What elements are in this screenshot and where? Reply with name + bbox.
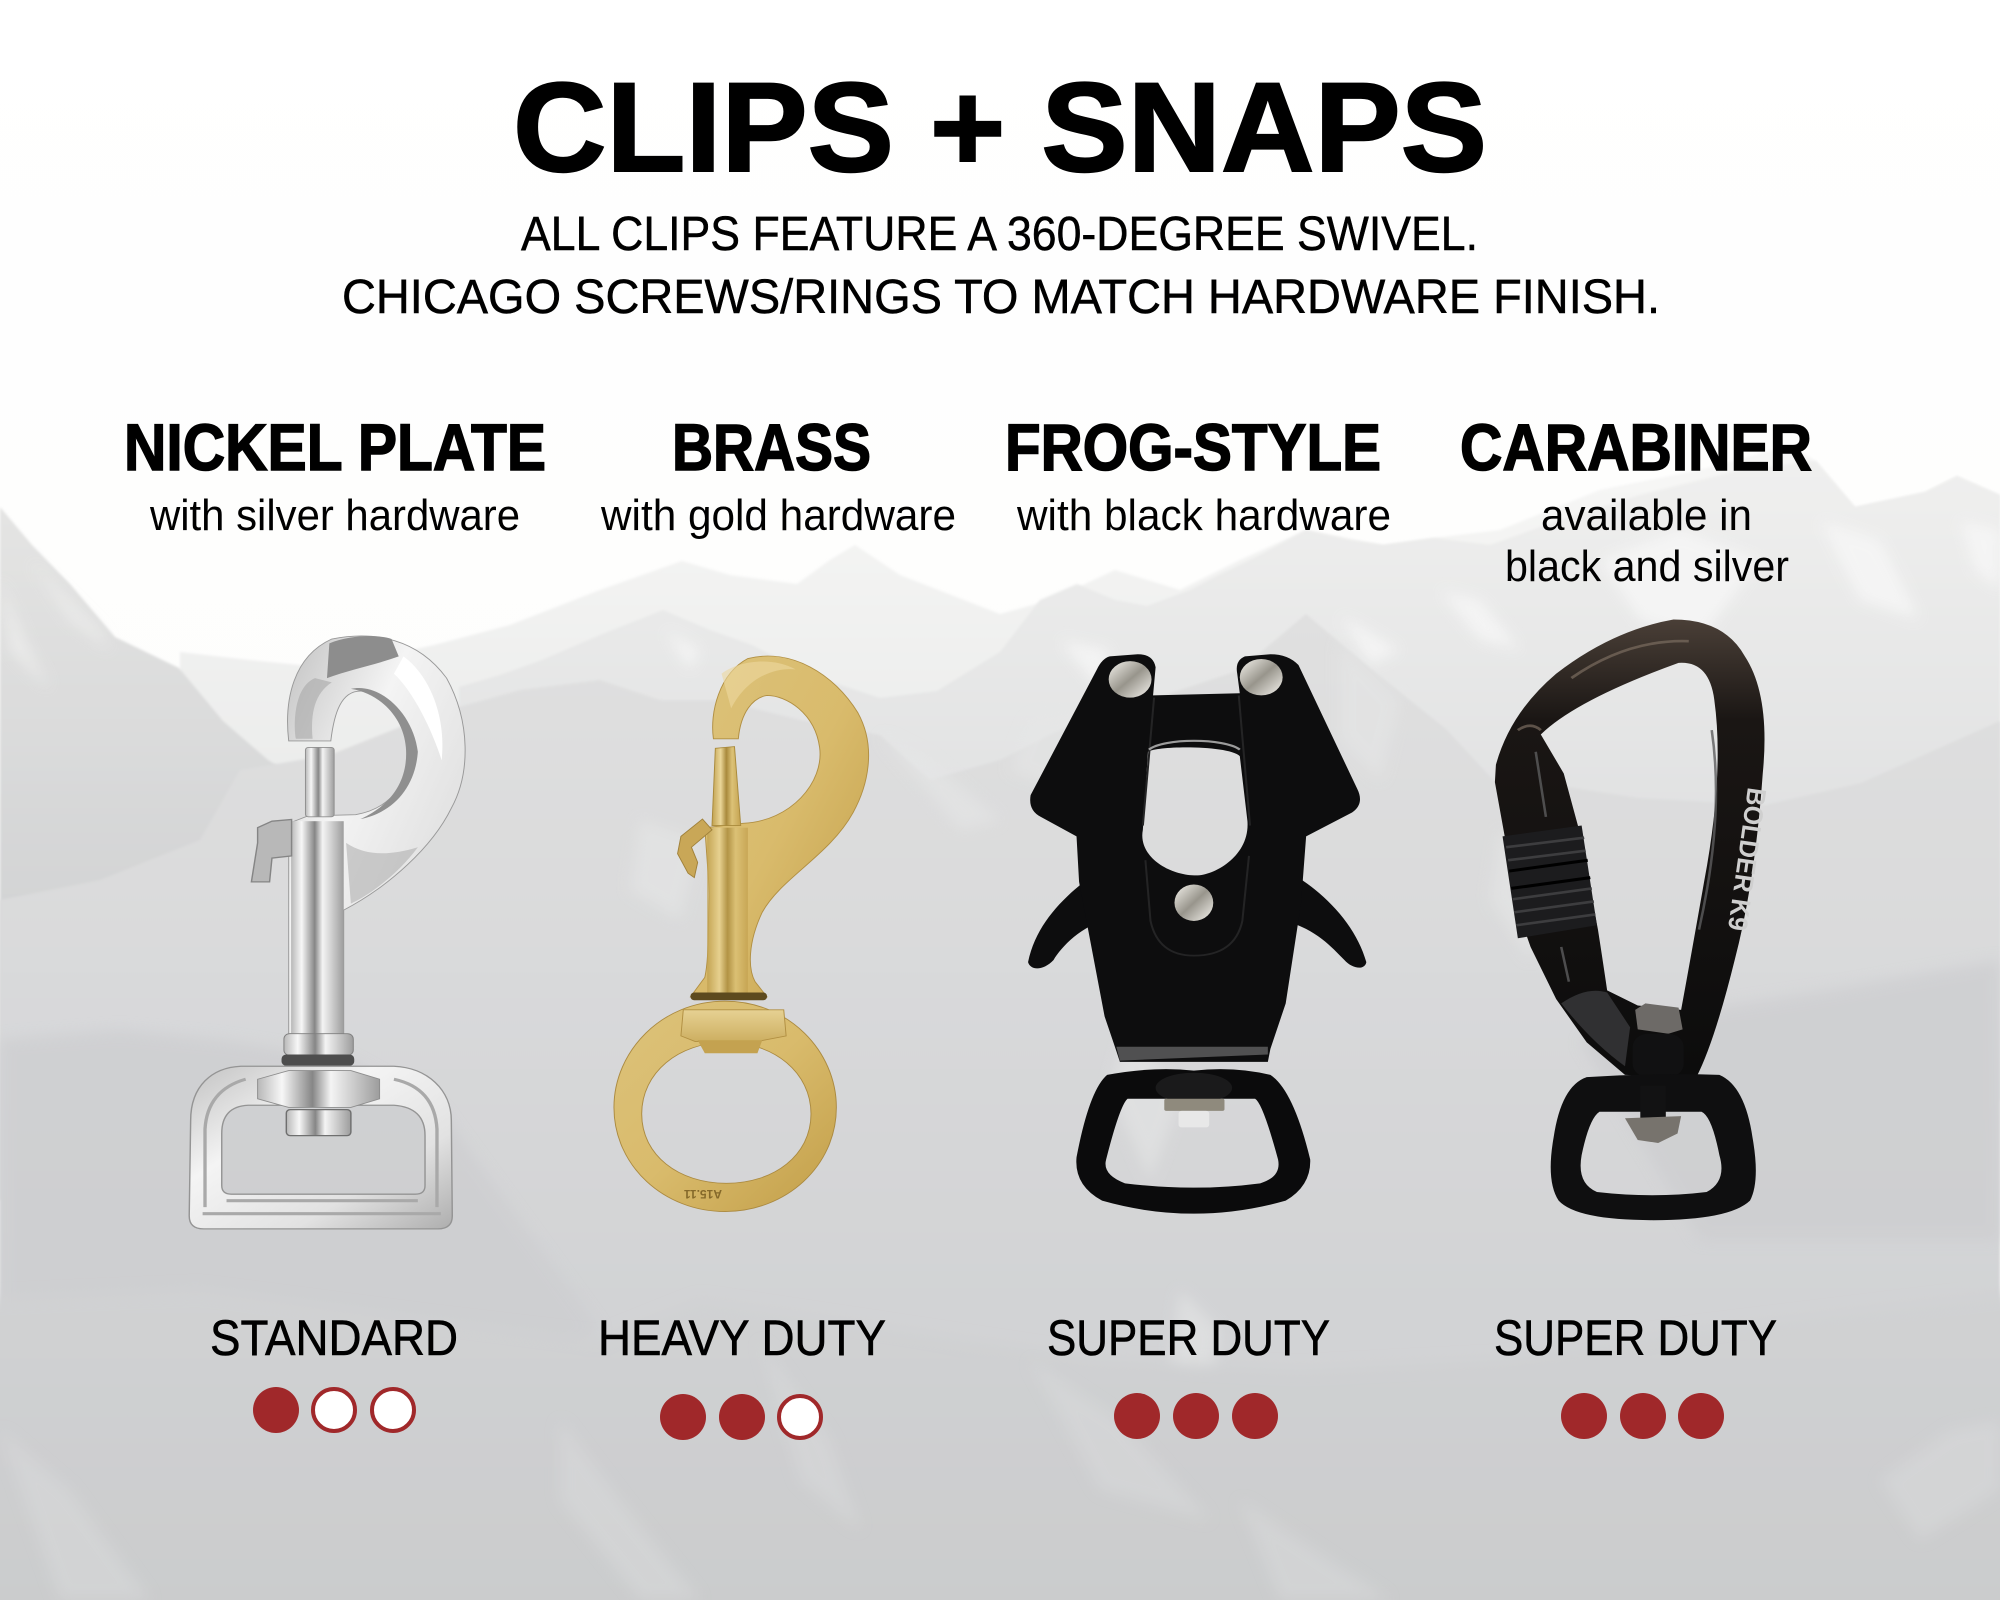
subtitle text block: CHICAGO SCREWS/RINGS TO MATCH HARDWARE FINISH. bbox=[342, 271, 1660, 324]
rating dots: 1 of 3 bbox=[253, 1387, 414, 1433]
description: availability bbox=[1505, 491, 1789, 591]
column: carabiner bbox=[1460, 410, 1812, 1439]
column: brass bbox=[598, 410, 956, 1440]
subtitle text block: ALL CLIPS FEATURE A 360-DEGREE SWIVEL. bbox=[521, 208, 1478, 261]
rating dots: 3 of 3 bbox=[1561, 1393, 1724, 1439]
heading: nickel plate: NICKEL PLATE bbox=[124, 410, 546, 484]
column: frog-style bbox=[1005, 410, 1391, 1439]
icon: nickel bolt snap bbox=[189, 636, 465, 1229]
description: gold hardware: with gold hardware bbox=[600, 491, 956, 540]
description: availability: black and silver bbox=[1505, 542, 1789, 591]
rating dots: 2 of 3 bbox=[660, 1394, 821, 1440]
durability label: super duty: SUPER DUTY bbox=[1047, 1310, 1330, 1366]
icon: locking carabiner bbox=[1495, 620, 1765, 1220]
rating dots: 3 of 3 bbox=[1114, 1393, 1278, 1439]
title: CLIPS + SNAPS bbox=[513, 56, 1487, 198]
durability label: super duty: SUPER DUTY bbox=[1494, 1310, 1777, 1366]
icon: brass bolt snap bbox=[614, 656, 869, 1212]
icon: frog-style clip bbox=[1028, 654, 1366, 1214]
description: availability: available in bbox=[1541, 491, 1752, 540]
brand text on carabiner: BOLDER K9 bbox=[1722, 786, 1772, 933]
heading: frog-style: FROG-STYLE bbox=[1005, 410, 1381, 484]
durability label: heavy duty: HEAVY DUTY bbox=[598, 1310, 886, 1366]
description: silver hardware: with silver hardware bbox=[149, 491, 520, 540]
stamp on brass ring: A15.11 bbox=[684, 1187, 722, 1201]
description: black hardware: with black hardware bbox=[1016, 491, 1391, 540]
durability label: standard: STANDARD bbox=[210, 1310, 458, 1366]
column: nickel plate bbox=[124, 410, 546, 1433]
subtitle text block bbox=[342, 208, 1660, 324]
heading: carabiner: CARABINER bbox=[1460, 410, 1812, 484]
heading: brass: BRASS bbox=[672, 410, 871, 484]
